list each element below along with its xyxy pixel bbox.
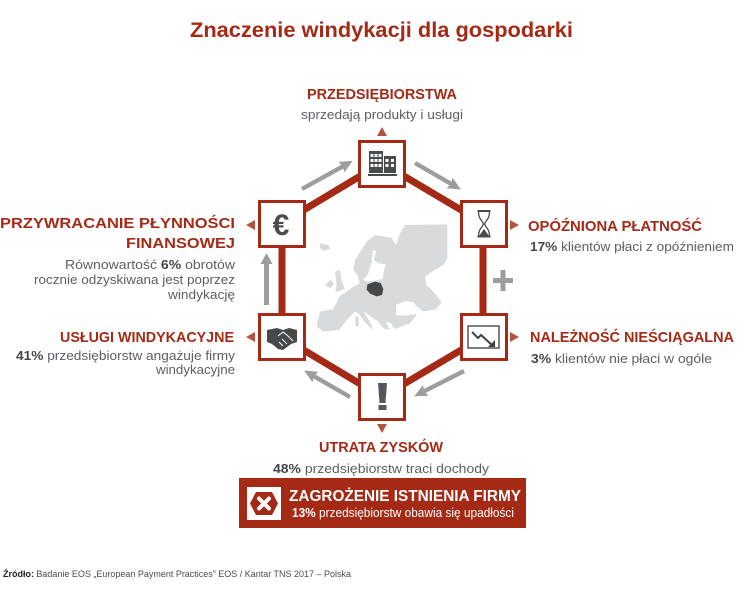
callout: threat to company: 13% przedsiębiorstw obawia się upadłości <box>292 506 514 520</box>
source note: Źródło: Badanie EOS „European Payment Practices” EOS / Kantar TNS 2017 – Polska <box>3 569 352 580</box>
node: late payment <box>462 202 506 246</box>
icon: euro sign: € <box>273 209 290 242</box>
icon: office buildings <box>368 151 397 176</box>
label: liquidity: FINANSOWEJ <box>126 235 235 252</box>
callout: threat to company <box>239 478 526 528</box>
plus sign <box>493 270 513 291</box>
Poland <box>367 282 383 296</box>
label: late payment <box>528 217 734 254</box>
label: liquidity: Równowartość 6% obrotów <box>65 257 236 272</box>
callout: threat to company: ZAGROŻENIE ISTNIENIA FIRMY <box>289 488 522 505</box>
icon: handshake <box>267 328 297 350</box>
arrow: left vertical <box>260 253 272 305</box>
icon: exclamation mark <box>378 383 387 410</box>
label: late payment: OPÓŹNIONA PŁATNOŚĆ <box>528 217 702 235</box>
label: enterprises <box>301 86 463 122</box>
node: collection services <box>260 314 304 360</box>
node: lost profit <box>360 374 404 420</box>
arrow: top right <box>412 158 464 195</box>
label: collection services: USŁUGI WINDYKACYJNE <box>60 329 234 346</box>
label: liquidity <box>0 214 236 302</box>
arrow: bottom left <box>301 365 353 402</box>
label: uncollectible debt: 3% klientów nie płaci w ogóle <box>531 351 712 366</box>
icon: falling chart <box>468 326 499 348</box>
label: collection services <box>16 329 236 377</box>
label: late payment: 17% klientów płaci z opóźnieniem <box>530 239 734 254</box>
label: lost profit: 48% przedsiębiorstw traci dochody <box>273 461 490 476</box>
title: Znaczenie windykacji dla gospodarki <box>190 19 573 42</box>
label: collection services: windykacyjne <box>155 362 235 377</box>
label: collection services: 41% przedsiębiorstw angażuje firmy <box>16 348 236 363</box>
label: enterprises: sprzedają produkty i usługi <box>301 107 463 122</box>
node: enterprises <box>360 142 404 186</box>
arrow: bottom right <box>411 366 467 402</box>
arrow: top left <box>299 156 356 194</box>
label: lost profit: UTRATA ZYSKÓW <box>319 438 444 456</box>
marker triangles <box>246 127 519 433</box>
label: lost profit <box>273 438 490 476</box>
label: uncollectible debt: NALEŻNOŚĆ NIEŚCIĄGALNA <box>530 328 734 346</box>
label: liquidity: PRZYWRACANIE PŁYNNOŚCI <box>0 214 235 232</box>
label: liquidity: rocznie odzyskiwana jest poprzez <box>34 272 235 287</box>
node: uncollectible debt <box>462 314 506 360</box>
connecting hexagon <box>282 163 483 397</box>
label: enterprises: PRZEDSIĘBIORSTWA <box>307 86 457 103</box>
icon: hourglass <box>478 211 490 236</box>
label: uncollectible debt <box>530 328 734 366</box>
icon: hexagon with cross <box>247 487 281 520</box>
node: liquidity <box>260 202 304 246</box>
label: liquidity: windykację <box>167 287 235 302</box>
map of Europe <box>317 224 447 332</box>
